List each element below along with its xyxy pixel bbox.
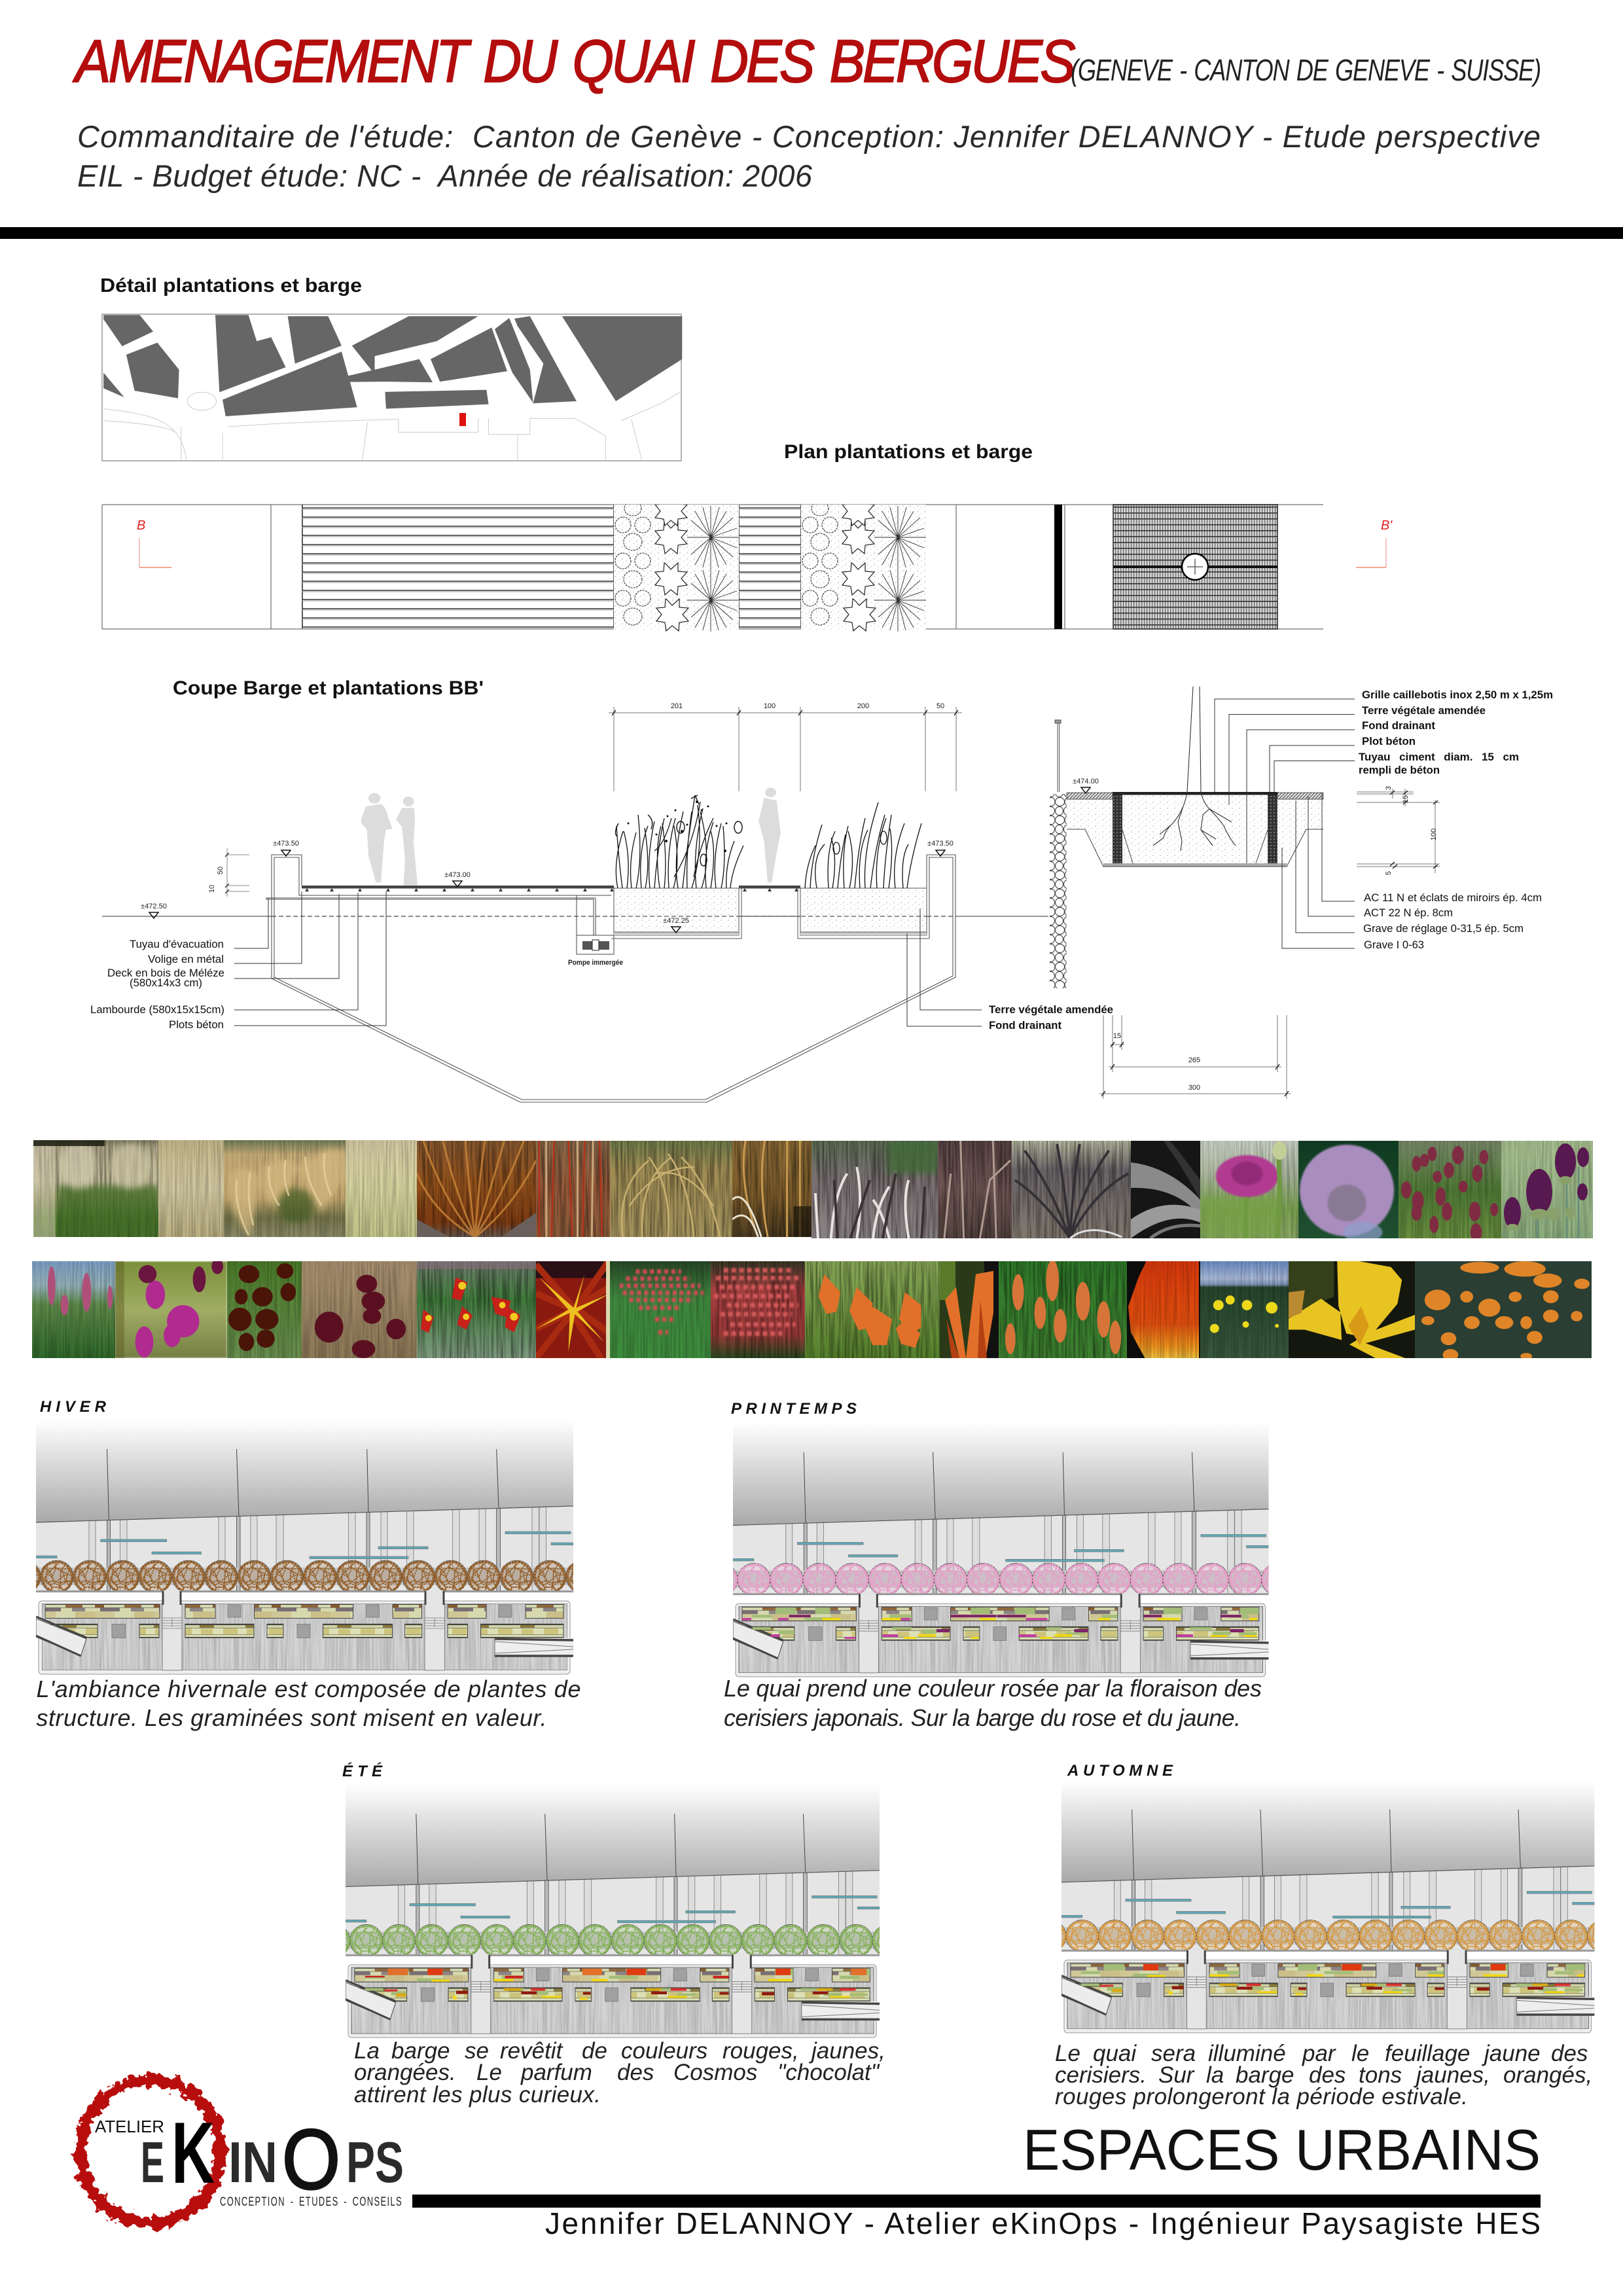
right labels: upper: Tuyau ciment diam. 15 cm: [1359, 751, 1519, 763]
spring caption: Le quai prend une couleur rosée par la floraison des: [724, 1675, 1262, 1702]
photo: blond grass: [346, 1140, 417, 1237]
summer caption: des: [617, 2060, 654, 2085]
autumn caption: la: [1206, 2062, 1224, 2088]
right labels: upper: rempli de béton: [1359, 764, 1440, 776]
panel: spring: [700, 1400, 1298, 1731]
top dimensions: [609, 702, 962, 791]
autumn caption: le: [1351, 2041, 1369, 2066]
photo: pink lupin spikes: [32, 1261, 115, 1358]
water line: [102, 916, 1048, 917]
planter 2: [798, 888, 929, 939]
right labels: upper: Plot béton: [1362, 735, 1416, 747]
left labels: [90, 938, 224, 1031]
logo wordmark: K: [171, 2105, 215, 2202]
silhouettes of people: [361, 788, 781, 886]
photo: red monarda: [610, 1261, 711, 1358]
stone wall: [1050, 794, 1067, 988]
autumn caption: des: [1551, 2041, 1588, 2066]
top dimensions: 50: [936, 702, 944, 710]
summer caption: rouges,: [722, 2038, 799, 2064]
dark edge: [1054, 505, 1062, 629]
winter quay illustration: [3, 1419, 603, 1674]
summer caption: Le: [476, 2060, 502, 2085]
bottom dimensions: 15: [1113, 1032, 1121, 1040]
photo: red massed flowers: [711, 1261, 805, 1358]
autumn caption: des: [1309, 2062, 1346, 2088]
autumn caption: Sur: [1158, 2062, 1195, 2088]
photo: tawny grass: [610, 1141, 732, 1237]
right side dimensions: [1357, 786, 1440, 875]
photo: yellow lily close-up: [1289, 1261, 1415, 1358]
logo wordmark: E: [141, 2130, 164, 2195]
photo: orange lily close-up: [940, 1261, 999, 1358]
photo: grey leaf close-up: [1131, 1141, 1200, 1238]
right labels: lower: ACT 22 N ép. 8cm: [1364, 906, 1453, 919]
summer caption: de: [582, 2038, 607, 2064]
right labels: upper: [1359, 689, 1553, 776]
title: AMENAGEMENT DU QUAI DES BERGUES: [73, 28, 1075, 95]
heading: spring: PRINTEMPS: [731, 1400, 857, 1418]
level values: [141, 778, 1099, 925]
photo: torch lily spikes: [999, 1260, 1127, 1358]
autumn caption: jaune: [1482, 2041, 1541, 2066]
photo: mauve phormium: [812, 1141, 938, 1238]
summer caption: "chocolat": [777, 2060, 880, 2085]
photo: day lily close-up: [536, 1261, 610, 1358]
logo wordmark: IN: [228, 2130, 277, 2195]
right labels: lower: Grave I 0-63: [1364, 939, 1424, 951]
autumn caption: illuminé: [1208, 2041, 1286, 2066]
winter caption: structure. Les graminées sont misent en valeur.: [37, 1704, 547, 1731]
logo wordmark: [141, 2105, 404, 2207]
logo: Atelier eKinOps: [80, 2080, 404, 2223]
panel: summer: [313, 1762, 910, 2108]
planting bed 2: [801, 505, 926, 632]
logo small word: ATELIER: [95, 2117, 164, 2136]
level values: ±473.50: [273, 840, 299, 848]
photo: red stems: [536, 1141, 610, 1237]
right side dimensions: 5: [1385, 871, 1393, 875]
summer caption: jaunes,: [809, 2038, 885, 2064]
ornamental grasses planter 1: [615, 795, 743, 888]
right labels: upper: Grille caillebotis inox 2,50 m x 1,25m: [1362, 689, 1553, 701]
section mark B': B': [1381, 518, 1393, 533]
planter leaders and labels: Terre végétale amendée: [989, 1003, 1113, 1016]
summer caption: [354, 2038, 885, 2108]
autumn caption: sera: [1151, 2041, 1196, 2066]
spring caption: cerisiers japonais. Sur la barge du rose et du jaune.: [724, 1704, 1241, 1731]
right side dimensions: 3: [1385, 786, 1393, 790]
bottom dimensions: [1099, 1015, 1291, 1099]
footer rule: [412, 2195, 1541, 2208]
summer caption: La: [354, 2038, 380, 2064]
left labels: Lambourde (580x15x15cm): [90, 1003, 224, 1016]
right labels: lower: Grave de réglage 0-31,5 ép. 5cm: [1363, 922, 1524, 935]
author line: Jennifer DELANNOY - Atelier eKinOps - Ingénieur Paysagiste HES: [545, 2206, 1541, 2240]
project details line 1: Commanditaire de l'étude: Canton de Genève - Conception: Jennifer DELANNOY - Etude perspective: [77, 119, 1541, 154]
location map: [102, 314, 682, 461]
autumn caption: Le: [1055, 2041, 1080, 2066]
right side dimensions: 15: [1402, 795, 1410, 803]
level values: ±472.50: [141, 903, 167, 910]
planter leaders and labels: [907, 908, 1113, 1031]
spring quay illustration: [700, 1422, 1298, 1677]
spring caption: [724, 1675, 1262, 1731]
railing post: [1055, 720, 1061, 792]
logo ring: [80, 2080, 221, 2223]
left labels: Volige en métal: [148, 953, 224, 965]
autumn quay illustration: [1029, 1780, 1623, 2033]
heading: autumn: AUTOMNE: [1067, 1762, 1173, 1780]
photo: chocolate cosmos: [227, 1261, 302, 1358]
section drawing: barge and plantings: [90, 687, 1553, 1102]
tree pit section: [1067, 687, 1323, 867]
bottom dimensions: 265: [1188, 1056, 1200, 1064]
photo: purple allium heads: [1501, 1141, 1593, 1238]
deck boards: [302, 508, 801, 628]
logo tagline: CONCEPTION - ETUDES - CONSEILS: [220, 2195, 402, 2209]
photo: orange lilies in foliage: [805, 1261, 940, 1358]
water level across planters: [614, 916, 927, 917]
level markers: [149, 787, 1090, 933]
autumn caption: rouges prolongeront la période estivale.: [1055, 2084, 1468, 2109]
autumn caption: par: [1302, 2041, 1336, 2066]
summer caption: attirent les plus curieux.: [354, 2082, 601, 2108]
panel: winter: [3, 1398, 603, 1731]
right side dimensions: 100: [1430, 829, 1438, 840]
photo: maroon drumstick allium: [1399, 1141, 1501, 1242]
photo: lilac allium: [1298, 1141, 1399, 1243]
logo wordmark: PS: [346, 2130, 404, 2195]
left height dimensions: 50: [217, 867, 224, 874]
bottom dimensions: 300: [1188, 1084, 1200, 1092]
header rule: [0, 227, 1623, 239]
photo: brown blades: [732, 1141, 812, 1237]
tree grating: [1113, 505, 1277, 629]
photo: orange California poppies: [1415, 1261, 1592, 1361]
header: title and project details: [73, 28, 1541, 193]
left labels: (580x14x3 cm): [130, 977, 202, 989]
summer caption: orangées.: [354, 2060, 456, 2085]
autumn caption: jaunes,: [1414, 2062, 1490, 2088]
autumn caption: feuillage: [1385, 2041, 1470, 2066]
autumn caption: [1055, 2041, 1592, 2109]
summer quay illustration: [313, 1784, 910, 2037]
photo strip: flowering plants: [32, 1259, 1592, 1361]
photo strip: winter and structure plants: [33, 1140, 1593, 1243]
category label: ESPACES URBAINS: [1023, 2117, 1541, 2182]
autumn caption: tons: [1359, 2062, 1402, 2088]
submersible pump: [568, 888, 623, 967]
top dimensions: 200: [857, 702, 869, 710]
photo: feather grass and green foliage: [33, 1140, 158, 1237]
heading: plan: Plan plantations et barge: [784, 441, 1033, 463]
summer caption: se: [465, 2038, 489, 2064]
winter caption: [37, 1676, 581, 1731]
winter caption: L'ambiance hivernale est composée de plantes de: [37, 1676, 581, 1702]
barge hull: [272, 855, 955, 1102]
panel: autumn: [1029, 1762, 1623, 2109]
right labels: upper: Fond drainant: [1362, 719, 1435, 732]
autumn caption: cerisiers.: [1055, 2062, 1147, 2088]
right labels: upper: Terre végétale amendée: [1362, 704, 1486, 717]
heading: winter: HIVER: [40, 1398, 107, 1416]
autumn caption: quai: [1093, 2041, 1137, 2066]
logo wordmark: O: [282, 2111, 340, 2207]
left labels: Deck en bois de Méléze: [107, 967, 224, 979]
summer caption: couleurs: [621, 2038, 707, 2064]
heading: detail: Détail plantations et barge: [100, 275, 362, 296]
submersible pump: Pompe immergée: [568, 959, 623, 967]
top dimensions: 201: [671, 702, 683, 710]
autumn caption: orangés,: [1503, 2062, 1592, 2088]
left height dimensions: 10: [208, 885, 216, 893]
level values: ±473.50: [927, 840, 954, 848]
left labels: Plots béton: [169, 1018, 224, 1031]
right labels: lower: AC 11 N et éclats de miroirs ép. 4cm: [1364, 891, 1542, 904]
right leader lines: [1215, 699, 1355, 948]
left leader lines: [234, 891, 386, 1026]
plan of plantings and barge: [102, 495, 1393, 632]
level values: ±474.00: [1073, 778, 1099, 785]
summer caption: parfum: [520, 2060, 592, 2085]
planter 1: [611, 888, 741, 939]
right labels: lower: [1363, 891, 1542, 951]
deck: [266, 886, 800, 935]
section mark B': [1356, 518, 1393, 567]
autumn caption: barge: [1236, 2062, 1294, 2088]
photo: dark leaf fan: [1012, 1141, 1131, 1238]
ornamental grasses planter 2: [805, 802, 921, 888]
summer caption: barge: [391, 2038, 450, 2064]
photo: dark red cosmos in grass: [302, 1261, 417, 1358]
level values: ±472.25: [663, 917, 689, 925]
photo: red day lilies: [417, 1261, 536, 1358]
planter leaders and labels: Fond drainant: [989, 1019, 1061, 1031]
section mark B: B: [137, 518, 145, 533]
planting bed 1: [614, 505, 739, 632]
heading: summer: ÉTÉ: [342, 1762, 383, 1780]
left labels: Tuyau d'évacuation: [130, 938, 224, 950]
level values: ±473.00: [444, 871, 471, 879]
top dimensions: 100: [764, 702, 776, 710]
photo: beige tufts: [224, 1140, 346, 1237]
heading: section: Coupe Barge et plantations BB': [173, 677, 484, 699]
photo: rust fan grass: [417, 1141, 536, 1237]
photo: brown phormium: [938, 1141, 1012, 1238]
project details line 2: EIL - Budget étude: NC - Année de réalisation: 2006: [77, 158, 813, 193]
photo: pale grass: [158, 1140, 224, 1237]
photo: yellow lilies in meadow: [1200, 1261, 1289, 1358]
photo: magenta orchids: [115, 1259, 227, 1358]
photo: red hot poker close-up: [1127, 1261, 1200, 1358]
section mark B: [137, 518, 171, 567]
summer caption: revêtit: [500, 2038, 563, 2064]
summer caption: Cosmos: [673, 2060, 757, 2085]
tree trunk and roots: [1153, 687, 1236, 851]
left height dimensions: [208, 848, 249, 897]
photo: pink allium: [1200, 1141, 1298, 1238]
